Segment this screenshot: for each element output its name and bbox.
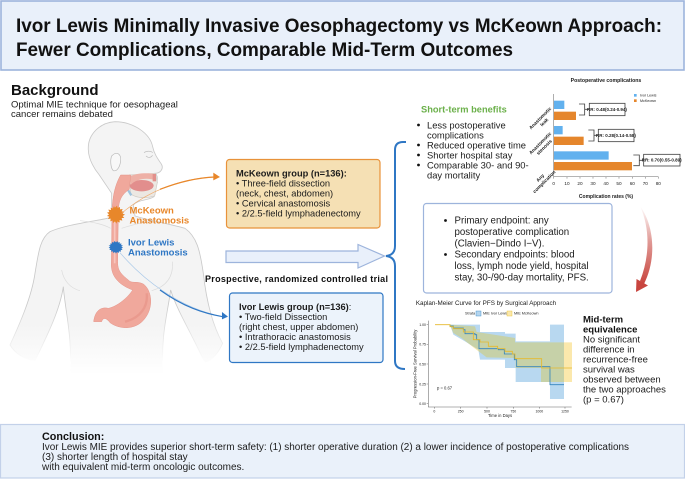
plot area: [412, 321, 572, 418]
label: McKeown anastomosis: [130, 206, 189, 226]
category labels: Anastomotic: [528, 131, 553, 156]
oesophagus and stomach: [94, 175, 151, 328]
panel: McKeown group: • Three-field dissection: [236, 178, 330, 188]
panel: Ivor Lewis group: • Intrathoracic anastomosis: [239, 332, 351, 342]
axis tick labels: 10: [564, 181, 570, 186]
axis tick labels: 60: [630, 181, 635, 186]
arrow: study flow: [226, 244, 384, 268]
axis labels: 1.00: [419, 323, 426, 327]
bars: [554, 101, 632, 170]
panel: short-term benefits: complications: [427, 129, 484, 140]
axes: [427, 321, 572, 409]
panel: McKeown group: (neck, chest, abdomen): [236, 188, 333, 198]
chart legend: MIE McKeown: [514, 312, 538, 316]
bar chart: postoperative complications: RR: 0.48(0.24-0.94): [587, 107, 627, 112]
background text block: Optimal MIE technique for oesophageal: [11, 100, 178, 110]
body contour lines: [62, 221, 173, 291]
oral cavity: [126, 173, 157, 198]
panel: McKeown group: [226, 160, 380, 228]
axes: [554, 94, 658, 179]
axis labels: 1250: [561, 409, 569, 413]
label: Ivor Lewis anastomosis: Anastomosis: [128, 248, 188, 258]
panel: Ivor Lewis group: Ivor Lewis group (n=136):: [239, 302, 351, 312]
panel: short-term benefits: Short-term benefits: [421, 104, 507, 114]
label: trial design: Prospective, randomized controlled trial: [205, 274, 388, 284]
axis labels: 0.00: [419, 402, 426, 406]
text block: mid-term equivalence: equivalence: [583, 324, 637, 335]
background text block: cancer remains debated: [11, 109, 113, 120]
panel: study endpoints: [424, 204, 612, 293]
panel: study endpoints: (Clavien−Dindo I−V).: [454, 238, 544, 250]
panel: McKeown group: McKeown group (n=136):: [236, 168, 347, 178]
text block: mid-term equivalence: No significant: [583, 334, 640, 345]
text block: mid-term equivalence: [583, 314, 666, 405]
bar chart: postoperative complications: RR: 0.70(0.55-0.89): [642, 158, 682, 163]
bar chart: postoperative complications: RR: 0.28(0.14-0.58): [596, 133, 636, 138]
label: Ivor Lewis anastomosis: Ivor Lewis: [128, 238, 174, 248]
chart legend: Strata: [465, 312, 476, 316]
panel: study endpoints: stay, 30-/90-day mortality, PFS.: [454, 272, 589, 284]
plot area: Progression-Free Survival Probability: [412, 329, 417, 398]
plot area: p = 0.67: [437, 385, 453, 390]
axis tick labels: [552, 181, 661, 186]
category labels: Anastomotic: [528, 106, 553, 131]
bracket connecting arms to outcomes: [386, 142, 406, 369]
axis labels: 1000: [535, 409, 543, 413]
bar chart: postoperative complications: Postoperative complications: [571, 78, 641, 84]
axis labels: 0: [433, 409, 435, 413]
axis tick labels: 0: [552, 181, 555, 186]
anatomy illustration: [10, 122, 228, 375]
panel: conclusion: with equivalent mid-term oncologic outcomes.: [41, 462, 244, 473]
category labels: stenosis: [536, 138, 554, 157]
axis labels: 0.50: [419, 362, 426, 366]
text block: mid-term equivalence: survival was: [583, 364, 635, 375]
icon: McKeown anastomosis marker: [107, 205, 125, 224]
label: Ivor Lewis anastomosis: [128, 238, 188, 258]
axis labels: 500: [484, 409, 490, 413]
axis tick labels: 70: [643, 181, 648, 186]
panel: McKeown group: • Cervical anastomosis: [236, 198, 331, 208]
background text block: [11, 82, 178, 120]
axis labels: 250: [458, 409, 464, 413]
title banner: Ivor Lewis Minimally Invasive Oesophagectomy vs McKeown Approach:: [16, 15, 662, 37]
confidence bands: [450, 325, 572, 382]
ear: [111, 153, 121, 171]
axis labels: 0.75: [419, 343, 426, 347]
axis tick labels: 30: [590, 181, 596, 186]
axis tick labels: 40: [603, 181, 609, 186]
facial features: [144, 151, 153, 157]
panel: short-term benefits: [417, 104, 529, 180]
panel: study endpoints: loss, lymph node yield, hospital: [454, 261, 589, 272]
panel: Ivor Lewis group: (right chest, upper abdomen): [239, 322, 358, 332]
chart: Kaplan-Meier curve: Kaplan-Meier Curve for PFS by Surgical Approach: [416, 300, 557, 307]
panel: conclusion: [0, 424, 684, 478]
panel: short-term benefits: Reduced operative time: [427, 139, 526, 150]
text block: mid-term equivalence: difference in: [583, 344, 635, 355]
text block: mid-term equivalence: Mid-term: [583, 314, 623, 325]
chart: Kaplan-Meier curve: [412, 300, 572, 418]
panel: conclusion: (3) shorter length of hospital stay: [42, 452, 188, 463]
panel: conclusion: Ivor Lewis MIE provides superior short-term safety: (1) shorter operative duration (2) a lower incidence of postoperative complications: [42, 442, 629, 453]
text block: mid-term equivalence: recurrence-free: [583, 354, 648, 365]
arrow: McKeown callout: [122, 173, 220, 213]
bar chart: postoperative complications: [528, 78, 682, 200]
title banner: Fewer Complications, Comparable Mid-Term Outcomes: [16, 39, 513, 61]
background text block: Background: [11, 82, 99, 99]
panel: McKeown group: • 2/2.5-field lymphadenectomy: [236, 208, 361, 218]
label: McKeown anastomosis: McKeown: [130, 206, 174, 216]
icon: Ivor Lewis anastomosis marker: [109, 241, 123, 254]
category labels: complication: [532, 170, 557, 195]
plot area: Time in Days: [488, 413, 512, 418]
panel: short-term benefits: Comparable 30- and 90-: [427, 159, 529, 170]
panel: study endpoints: postoperative complication: [454, 227, 569, 238]
text block: mid-term equivalence: observed between: [583, 374, 661, 385]
chart legend: MIE Ivor Lewis: [483, 312, 508, 316]
text block: mid-term equivalence: the two approaches: [583, 384, 666, 395]
panel: Ivor Lewis group: • Two-field Dissection: [239, 312, 327, 322]
risk ratio callouts: [579, 103, 680, 166]
axis labels: [419, 323, 569, 413]
text block: mid-term equivalence: (p = 0.67): [583, 394, 624, 405]
body silhouette: [10, 122, 223, 375]
legend: McKeown: [640, 99, 656, 103]
axis labels: 750: [510, 409, 516, 413]
axis tick labels: 80: [656, 181, 661, 186]
panel: study endpoints: Primary endpoint: any: [454, 216, 549, 226]
panel: Ivor Lewis group: • 2/2.5-field lymphadenectomy: [239, 342, 364, 352]
axis tick labels: 20: [577, 181, 583, 186]
survival curves: [450, 325, 564, 385]
arrow: short-term to mid-term: [636, 206, 652, 292]
bar chart: postoperative complications: Complication rates (%): [579, 194, 633, 200]
title banner: [1, 1, 684, 70]
legend: Ivor Lewis: [640, 94, 657, 98]
panel: study endpoints: Secondary endpoints: blood: [454, 250, 575, 260]
panel: short-term benefits: Shorter hospital stay: [427, 149, 513, 160]
axis tick labels: 50: [616, 181, 622, 186]
category labels: [528, 106, 557, 195]
panel: short-term benefits: Less postoperative: [427, 119, 506, 130]
panel: short-term benefits: day mortality: [427, 169, 480, 180]
axis labels: 0.25: [419, 382, 426, 386]
category labels: leak: [539, 117, 550, 128]
panel: Ivor Lewis group: [230, 293, 383, 362]
category labels: Any: [535, 173, 546, 184]
arrow: Ivor Lewis callout: [120, 253, 228, 319]
legend: [634, 94, 657, 103]
label: McKeown anastomosis: Anastomosis: [130, 216, 189, 226]
chart legend: [465, 311, 538, 316]
panel: conclusion: Conclusion:: [42, 431, 104, 443]
